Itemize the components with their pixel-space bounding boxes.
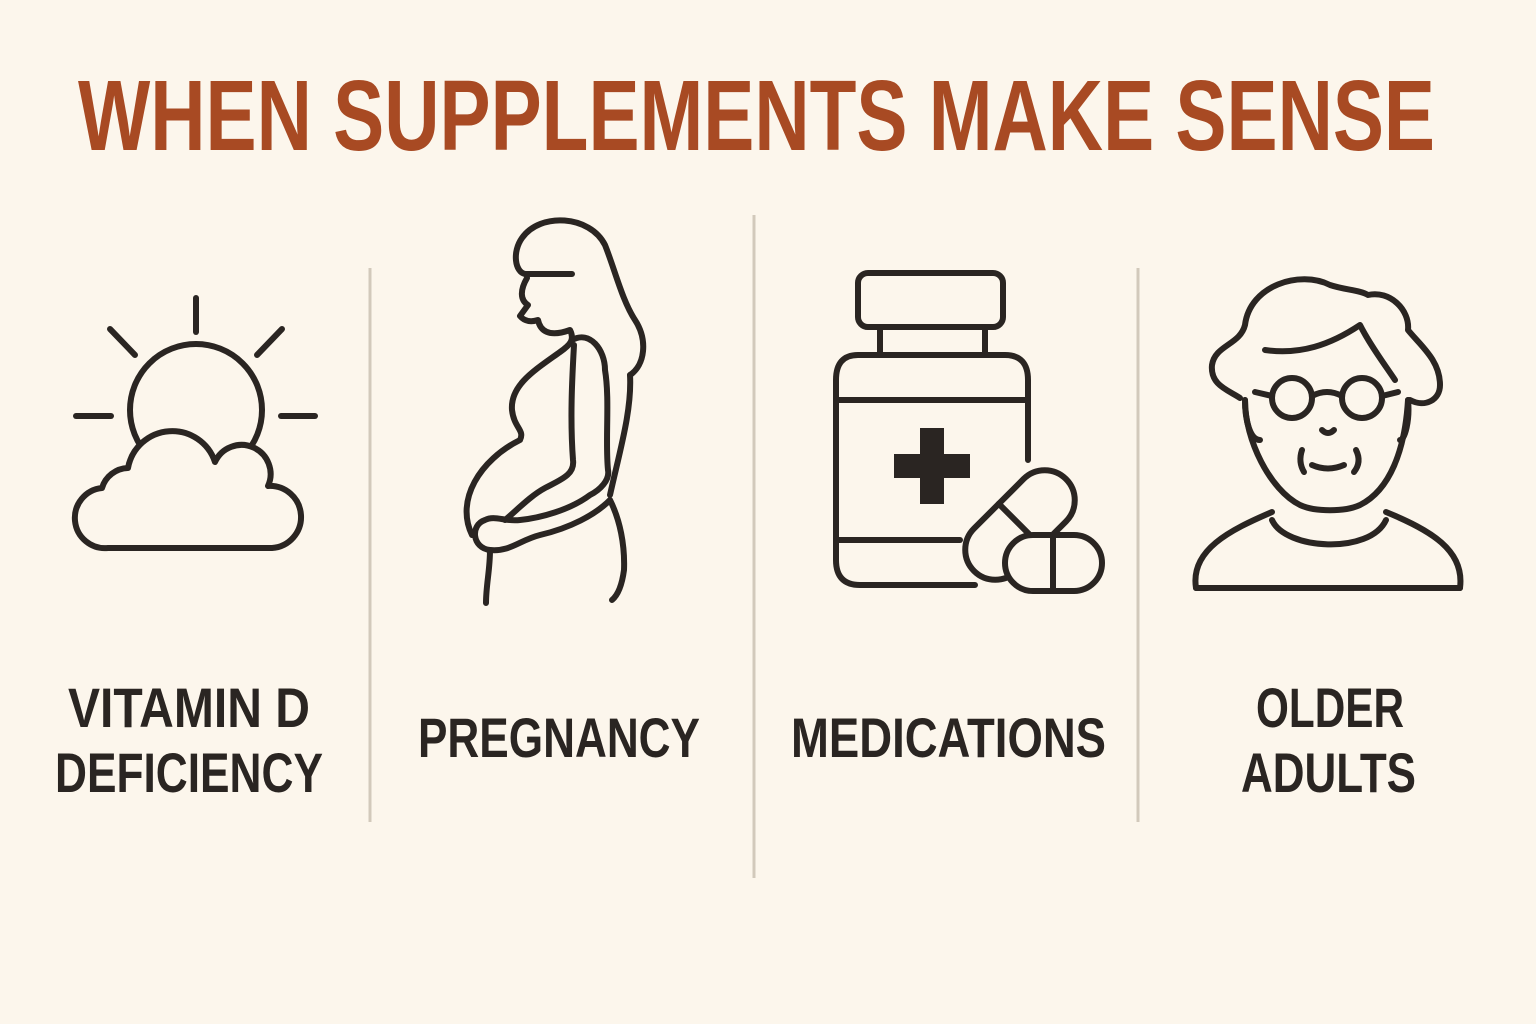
icon: pregnant woman: [467, 220, 643, 603]
label: vitamin D deficiency: VITAMIN D: [68, 676, 310, 739]
icon: sun and cloud: [75, 298, 315, 548]
icon: older adult: [1195, 279, 1460, 588]
label: medications: MEDICATIONS: [791, 706, 1106, 769]
icon: medicine bottle with pills: [836, 273, 1102, 592]
label: vitamin D deficiency: DEFICIENCY: [55, 741, 323, 804]
label: vitamin D deficiency: [55, 676, 323, 804]
label: older adults: OLDER: [1256, 676, 1404, 739]
label: older adults: ADULTS: [1241, 741, 1416, 804]
label: pregnancy: PREGNANCY: [418, 706, 700, 769]
label: older adults: [1241, 676, 1416, 804]
